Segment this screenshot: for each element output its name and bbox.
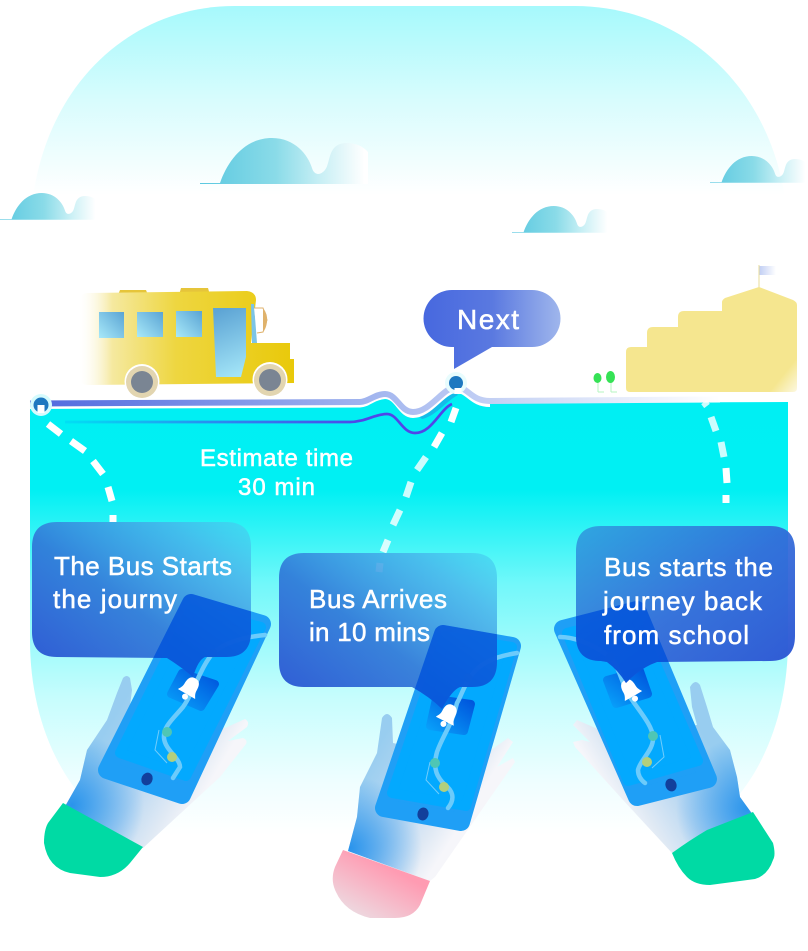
dashed connector: school [704,402,727,503]
next label: Next [457,304,519,335]
bubble text: Bus Arrives [309,584,447,614]
sky panel [30,6,788,240]
stop dots [430,674,472,792]
route on phone [164,635,265,778]
wrist shading [573,682,753,853]
bus rear wheel [124,364,160,399]
phone seen through bubble [576,601,668,683]
thin route [652,735,664,768]
bubble: bus starts back [576,526,795,683]
flag pole [758,265,760,288]
tree one [594,373,604,392]
cloud: middle low [512,206,609,233]
bus front wheel [252,362,288,397]
phone screen [120,609,261,776]
bell icon [433,701,462,731]
bubble text: in 10 mins [309,617,430,647]
bubble text: The Bus Starts [54,551,232,581]
bubble text: from school [604,620,749,650]
stop dots [162,648,218,762]
bell icon [616,675,645,706]
phone body [107,603,262,795]
bubble: the bus starts [32,522,251,677]
dashed connector: start [41,405,113,522]
thin route [426,762,439,794]
stop dots [606,652,658,767]
next speech bubble [424,290,560,369]
route line thick [30,387,720,416]
bubble text [53,551,232,614]
phone body [384,634,512,822]
thin route [155,730,167,763]
bubble text: journey back [602,586,763,616]
hand [348,714,515,881]
road shadow wedge [417,389,458,419]
phone screen [567,616,698,781]
trees [594,371,617,392]
next stop marker [445,372,467,394]
notification tile [607,671,648,704]
route line thin [65,404,452,433]
bubble text: Bus starts the [604,552,773,582]
notification tile [171,673,215,707]
phone seen through bubble [153,594,251,677]
bus windows [99,312,124,338]
clouds [0,138,807,233]
bus roof hatches [118,288,210,295]
green cuff [672,812,774,885]
school bus [80,288,294,399]
pink cuff [333,850,430,918]
cloud: large centre [200,138,368,184]
route on phone [560,637,653,783]
phone body [563,610,708,797]
hand two with phone [333,634,517,918]
estimate time label: 30 min [238,474,315,501]
school building [626,265,797,392]
hand one with phone [44,603,265,877]
bus body [80,291,294,385]
bubble: bus arrives [279,553,497,709]
phone seen through bubble [415,625,497,709]
bus mirror [254,308,267,333]
home button [416,806,430,822]
bubble text [309,584,447,647]
dashed connector: next stop [379,388,458,572]
notification tile [430,699,471,731]
home button [139,771,155,787]
start stop marker [30,394,52,416]
green cuff [44,803,143,877]
tree two [606,371,617,392]
flag [760,266,776,275]
estimate time label: Estimate time [200,445,353,472]
bubble text [602,552,773,650]
bus door [213,308,246,377]
wrist shading [348,714,515,881]
school body [626,287,797,392]
wrist shading [63,676,248,848]
home button [664,777,678,793]
ground panel [30,392,788,860]
hand [63,676,248,848]
phone screen [392,636,512,806]
cloud: left [0,193,97,220]
bell icon [175,673,204,704]
route on phone [435,653,517,808]
estimate time label [200,445,353,501]
bus windshield [251,304,257,343]
cloud: right [710,156,807,183]
hand three with phone [560,610,774,885]
hand [573,682,753,853]
bubble text: the journy [53,584,177,614]
